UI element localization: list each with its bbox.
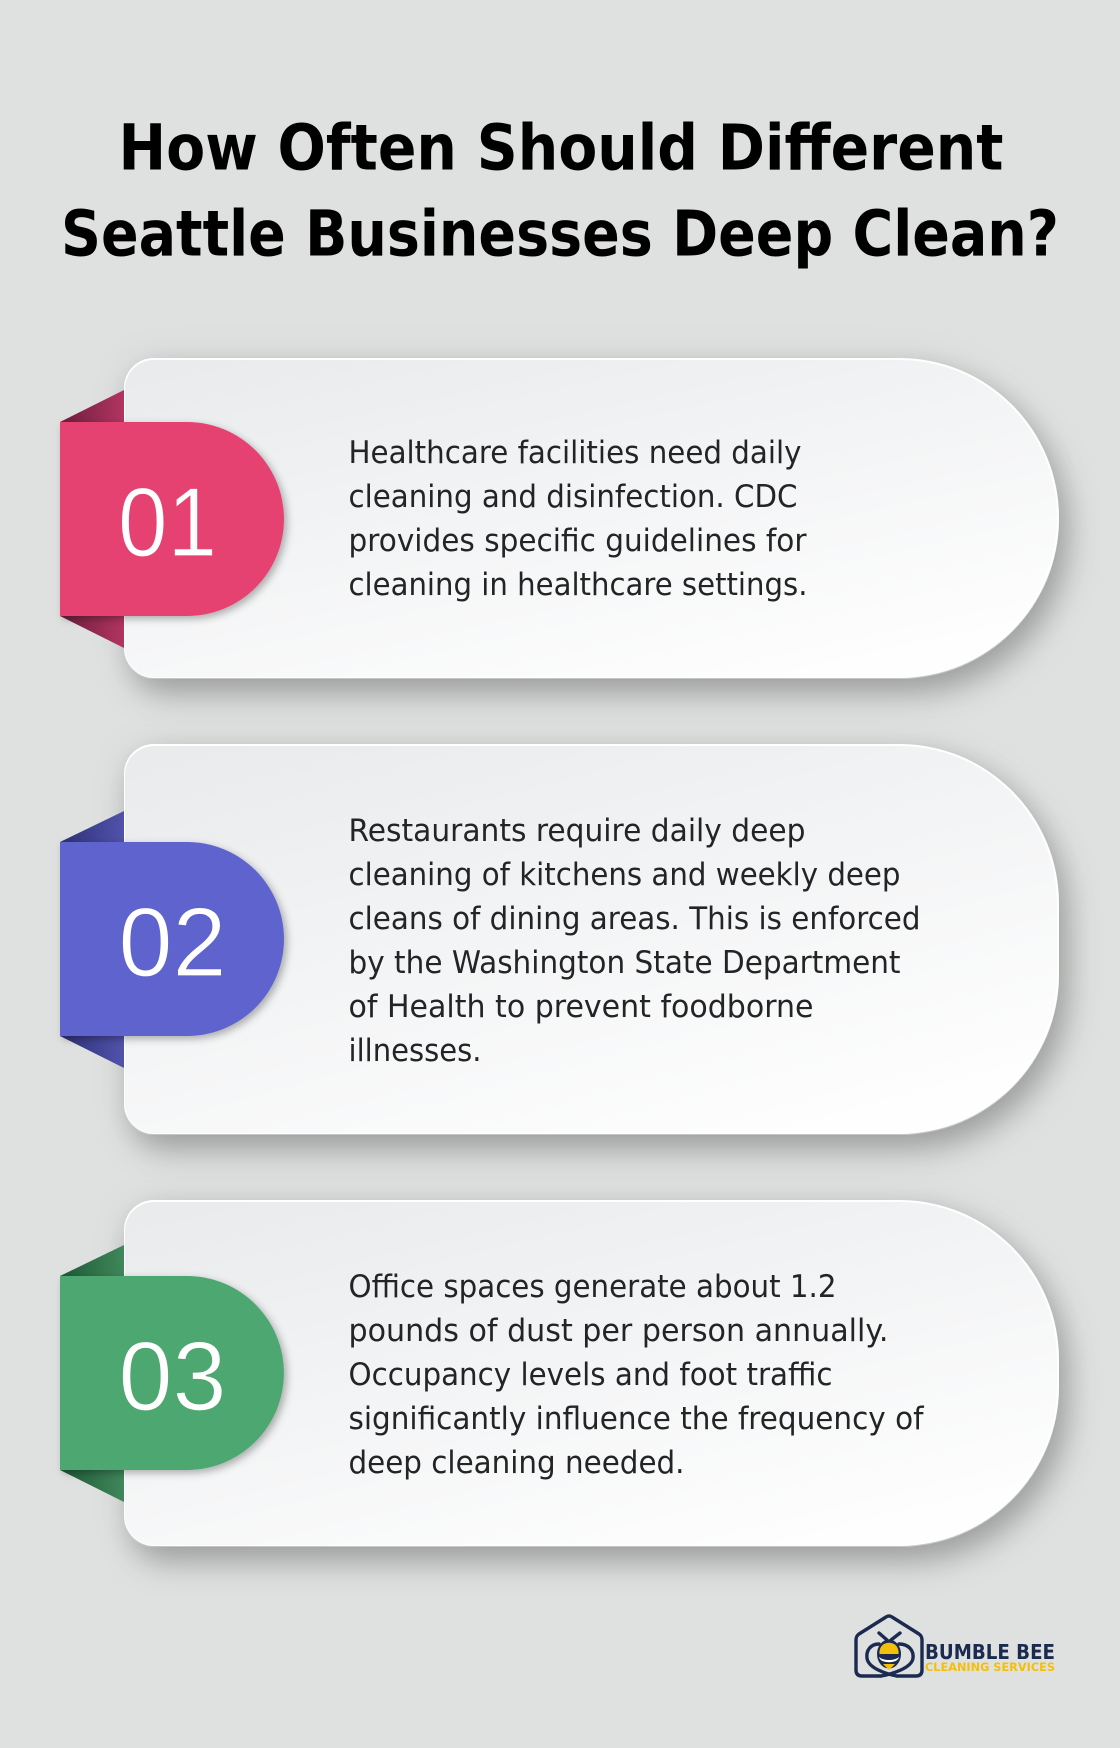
text: healthcare (348, 435, 808, 603)
text: office spaces: pounds of dust per person annually. (348, 1313, 888, 1349)
text: restaurants: by the Washington State Department (348, 945, 900, 981)
text: restaurants: cleaning of kitchens and weekly deep (348, 857, 900, 893)
text: restaurants: Restaurants require daily deep (348, 813, 806, 849)
number badge 03 (60, 1276, 284, 1470)
text: office spaces: Office spaces generate about 1.2 (348, 1269, 836, 1305)
text: healthcare: provides specific guidelines for (348, 523, 807, 559)
title (61, 112, 1059, 270)
logo wordmark: BUMBLE BEE (925, 1640, 1055, 1664)
panel: healthcare facilities (60, 358, 1059, 679)
number badge 02 (60, 842, 284, 1036)
card background 2 (124, 744, 1059, 1135)
text: office spaces: deep cleaning needed. (348, 1445, 684, 1481)
text: healthcare: cleaning in healthcare settings. (348, 567, 808, 603)
number badge 03: 03 (118, 1321, 226, 1431)
text: healthcare: Healthcare facilities need daily (348, 435, 802, 471)
ribbon folds 2 (60, 811, 124, 1068)
number badge 01: 01 (118, 467, 217, 577)
logo: Bumble Bee Cleaning Services (856, 1616, 1055, 1676)
text: restaurants: of Health to prevent foodborne (348, 989, 814, 1025)
card background 3 (124, 1200, 1059, 1547)
text: restaurants (348, 813, 920, 1069)
title: How Often Should Different (118, 112, 1004, 184)
ribbon folds 3 (60, 1245, 124, 1502)
text: office spaces: Occupancy levels and foot traffic (348, 1357, 832, 1393)
number badge 02: 02 (118, 887, 226, 997)
card background 1 (124, 358, 1059, 679)
logo tagline: CLEANING SERVICES (925, 1660, 1055, 1674)
icon: house with bee (856, 1616, 922, 1676)
text: office spaces (348, 1269, 925, 1481)
text: healthcare: cleaning and disinfection. CDC (348, 479, 798, 515)
panel: office spaces (60, 1200, 1059, 1547)
panel: restaurants (60, 744, 1059, 1135)
number badge 01 (60, 422, 284, 616)
text: office spaces: significantly influence the frequency of (348, 1401, 925, 1437)
text: restaurants: illnesses. (348, 1033, 482, 1069)
ribbon folds 1 (60, 390, 124, 648)
text: restaurants: cleans of dining areas. This is enforced (348, 901, 920, 937)
